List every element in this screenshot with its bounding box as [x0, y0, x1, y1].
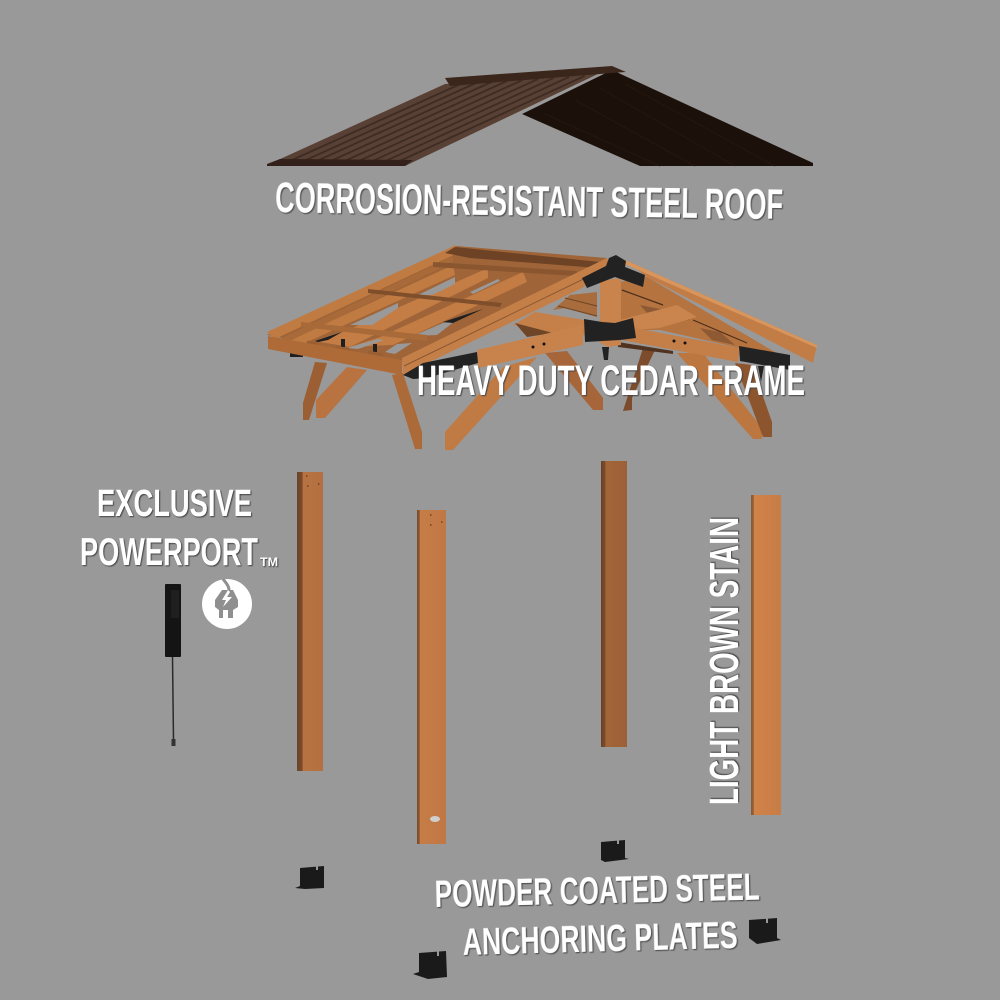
post 2 [417, 510, 446, 844]
deck slats [290, 265, 527, 347]
roof right dark slope [522, 70, 813, 166]
post 3 [601, 461, 627, 747]
deck gaps [347, 277, 500, 354]
roof ridge cap [445, 66, 626, 86]
deck shadow pieces [290, 309, 483, 357]
post 1 [297, 472, 323, 771]
tie holes right [672, 340, 686, 344]
plate 1 [295, 866, 324, 889]
left upper brace [513, 312, 585, 335]
plates line 1: POWDER COATED STEEL [434, 867, 760, 916]
exclusive text: EXCLUSIVE [97, 483, 252, 525]
cedar frame [267, 245, 817, 450]
plates heading [434, 867, 760, 964]
powerport device [165, 584, 181, 746]
roof right slope ribs [545, 84, 775, 166]
plate 3 [749, 918, 781, 944]
trademark: TM [260, 555, 278, 569]
stain label: LIGHT BROWN STAIN [701, 517, 747, 805]
powerport text: POWERPORT [80, 531, 258, 574]
right braces [620, 305, 697, 330]
icon: power plug [202, 579, 252, 629]
frame legs [303, 348, 772, 450]
back rafter [267, 245, 458, 340]
posts [297, 461, 781, 844]
cross purlins [301, 247, 600, 341]
roof corrugation lines [274, 76, 592, 165]
post 4 [751, 495, 781, 815]
right underside boards [618, 277, 780, 355]
tie holes left [532, 342, 546, 348]
roof left slope [267, 73, 600, 166]
roof ribs visible [281, 76, 584, 165]
powerport label [80, 483, 278, 574]
front left rafter [402, 258, 612, 375]
plate 4 [413, 951, 447, 979]
plate 2 [601, 840, 629, 862]
fascia feet [307, 342, 383, 355]
king post [600, 278, 621, 347]
left tie beam [477, 325, 583, 368]
right rafter [625, 260, 817, 363]
left deck base [267, 246, 607, 362]
black brackets [403, 255, 790, 382]
anchoring plates [295, 840, 781, 979]
roof eave band [267, 159, 413, 166]
plates line 2: ANCHORING PLATES [462, 915, 738, 964]
front fascia [268, 336, 402, 375]
left underside boards [553, 292, 597, 317]
steel roof [267, 66, 813, 166]
